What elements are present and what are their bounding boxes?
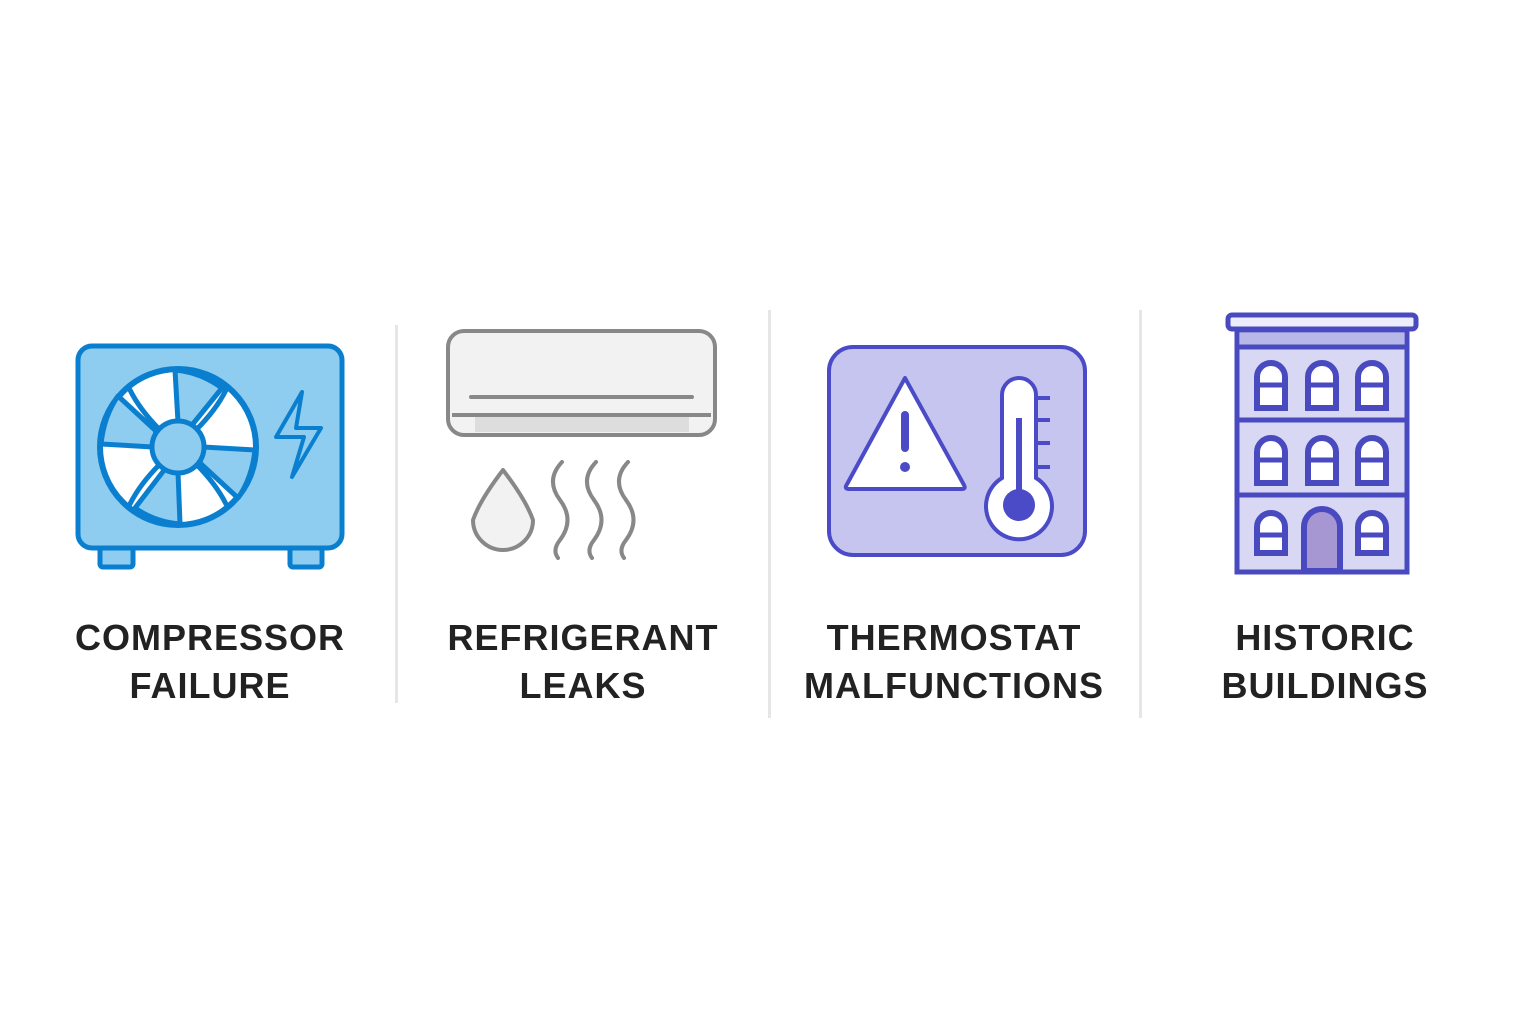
- label: thermostat malfunctions: THERMOSTAT: [827, 617, 1081, 658]
- label: refrigerant leaks: REFRIGERANT: [448, 617, 718, 658]
- label: compressor failure: COMPRESSOR: [75, 617, 345, 658]
- label: thermostat malfunctions: [804, 617, 1104, 706]
- label: historic buildings: [1222, 617, 1428, 706]
- label: historic buildings: BUILDINGS: [1222, 665, 1428, 706]
- label: compressor failure: FAILURE: [129, 665, 290, 706]
- label: compressor failure: [75, 617, 345, 706]
- label: refrigerant leaks: LEAKS: [519, 665, 646, 706]
- label: refrigerant leaks: [448, 617, 718, 706]
- label: historic buildings: HISTORIC: [1235, 617, 1415, 658]
- label: thermostat malfunctions: MALFUNCTIONS: [804, 665, 1104, 706]
